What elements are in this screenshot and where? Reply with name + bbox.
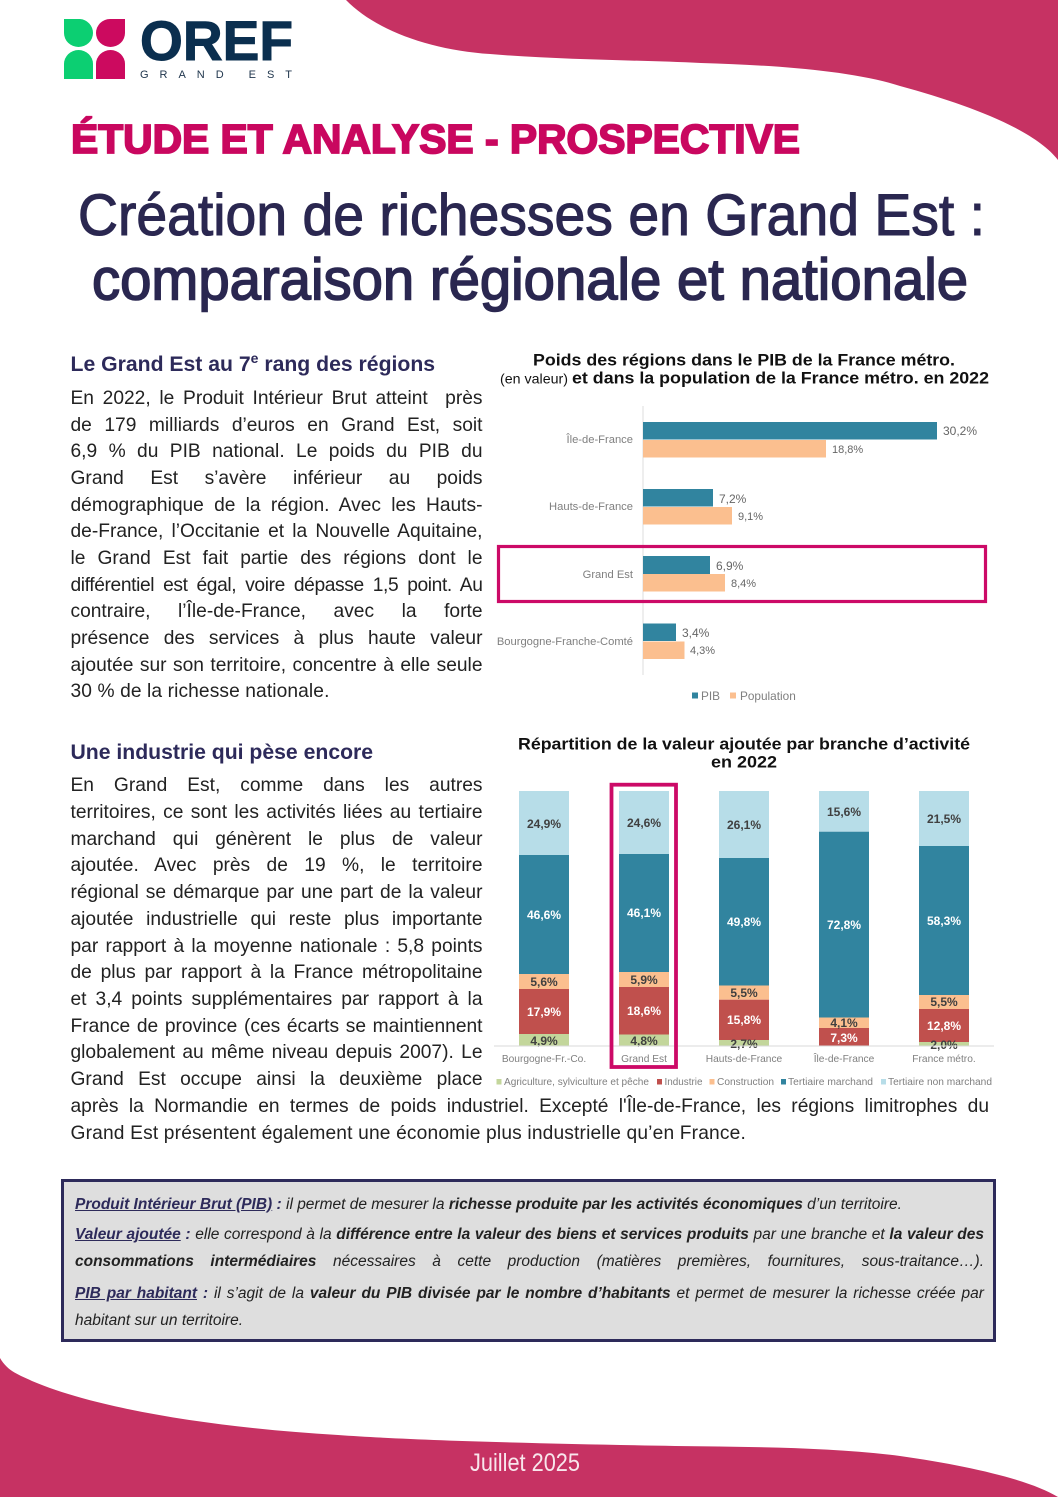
stacked bar: France métro.: 2,0% xyxy=(930,1038,958,1052)
stacked bar: Bourgogne-Fr.-Co.: 4,9% xyxy=(530,1034,558,1048)
body text: globalement au même niveau depuis 2007). Le xyxy=(70,1042,482,1063)
chart title xyxy=(518,736,970,772)
body text: de-France, l’Occitanie et la Nouvelle Aquitaine, xyxy=(70,521,482,542)
body text: Grand Est présentent également une économie plus industrielle qu’en France. xyxy=(70,1123,746,1144)
logo: OREF Grand Est xyxy=(64,9,293,81)
stacked bar: Île-de-France: 15,6% xyxy=(827,805,861,819)
stacked bar: France métro.: France métro. xyxy=(912,1054,976,1065)
bars: Hauts-de-France: 9,1% xyxy=(738,511,763,523)
logo: OREF Grand Est: GRAND EST xyxy=(140,69,292,81)
chart legend: Tertiaire non marchand xyxy=(888,1077,992,1088)
stacked bar: Île-de-France: Île-de-France xyxy=(813,1052,875,1065)
bars: Bourgogne-Franche-Comté: 3,4% xyxy=(682,626,710,640)
chart legend: PIB xyxy=(701,689,720,703)
stacked bar: Bourgogne-Fr.-Co. xyxy=(502,791,586,1065)
stacked bar: Grand Est: 46,1% xyxy=(627,906,661,920)
bars: Grand Est xyxy=(583,556,756,592)
stacked bar: France métro.: 12,8% xyxy=(927,1019,961,1033)
callout: définitions: habitant sur un territoire. xyxy=(75,1312,243,1329)
highlight box: Grand Est xyxy=(498,546,986,602)
stacked bar: Hauts-de-France: 2,7% xyxy=(730,1037,758,1051)
body text: contraire, l’Île-de-France, avec la forte xyxy=(70,601,482,622)
chart title: Poids des régions dans le PIB de la France métro. xyxy=(533,352,955,370)
stacked bar: Hauts-de-France: Hauts-de-France xyxy=(706,1054,783,1065)
stacked bar: Grand Est: 4,8% xyxy=(630,1034,658,1048)
body text: 30 % de la richesse nationale. xyxy=(70,681,330,702)
kicker heading: ÉTUDE ET ANALYSE - PROSPECTIVE xyxy=(71,116,800,162)
bars: Grand Est: Grand Est xyxy=(583,569,634,581)
bars: Bourgogne-Franche-Comté: 4,3% xyxy=(690,645,715,657)
bars: Hauts-de-France: Hauts-de-France xyxy=(549,501,633,513)
logo: OREF Grand Est: OREF xyxy=(140,9,293,72)
section: Une industrie qui pèse encore xyxy=(70,741,989,1144)
stacked bar: Bourgogne-Fr.-Co.: 46,6% xyxy=(527,908,561,922)
body text: par rapport à la moyenne nationale : 5,8 points xyxy=(70,936,482,957)
body text xyxy=(70,388,482,702)
body text: En Grand Est, comme dans les autres xyxy=(70,775,482,796)
body text: ajoutée sur son territoire, concentre à elle seule xyxy=(70,655,482,676)
chart legend: Construction xyxy=(717,1077,774,1088)
body text xyxy=(70,775,989,1144)
body text: ajoutée. Avec près de 19 %, le territoire xyxy=(70,855,482,876)
body text: et 3,4 points supplémentaires par rapport à la xyxy=(70,989,482,1010)
section heading: Une industrie qui pèse encore xyxy=(70,741,373,764)
bars: Grand Est: 8,4% xyxy=(731,578,756,590)
footer date: Juillet 2025 xyxy=(470,1449,580,1477)
chart title xyxy=(500,352,989,388)
stacked bar: Grand Est: 5,9% xyxy=(630,973,658,987)
bars: Île-de-France: Île-de-France xyxy=(565,433,633,446)
stacked bar: Hauts-de-France: 5,5% xyxy=(730,986,758,1000)
stacked bar: Île-de-France: 72,8% xyxy=(827,918,861,932)
callout: définitions: consommations intermédiaires nécessaires à cette production (matières premières, fournitures, sous-traitance…). xyxy=(75,1253,984,1270)
body text: France de province (ces écarts se maintiennent xyxy=(70,1016,482,1037)
stacked bar: France métro.: 5,5% xyxy=(930,995,958,1009)
body text: Grand Est s’avère inférieur au poids xyxy=(70,468,482,489)
stacked bar: France métro.: 21,5% xyxy=(927,812,961,826)
chart title: Répartition de la valeur ajoutée par branche d’activité xyxy=(518,736,970,754)
chart legend: Agriculture, sylviculture et pêche xyxy=(504,1077,649,1088)
bars: Île-de-France xyxy=(565,422,977,458)
stacked bar: Grand Est: 18,6% xyxy=(627,1004,661,1018)
stacked bar: Hauts-de-France: 15,8% xyxy=(727,1013,761,1027)
bars: Île-de-France: 18,8% xyxy=(832,444,863,456)
callout: définitions: PIB par habitant : il s’agit de la valeur du PIB divisée par le nombre d’habitants et permet de mesurer la richesse créée par xyxy=(75,1285,984,1302)
chart legend: Tertiaire marchand xyxy=(788,1077,873,1088)
body text: le Grand Est fait partie des régions dont le xyxy=(70,548,482,569)
stacked bar: Île-de-France xyxy=(813,791,875,1065)
body text: ajoutée industrielle qui reste plus importante xyxy=(70,909,482,930)
stacked bar: France métro.: 58,3% xyxy=(927,914,961,928)
bars: Bourgogne-Franche-Comté: Bourgogne-Franche-Comté xyxy=(497,636,633,648)
chart legend xyxy=(692,689,796,703)
body text: de plus par rapport à la France métropolitaine xyxy=(70,962,482,983)
bars: Hauts-de-France xyxy=(549,489,763,524)
body text: En 2022, le Produit Intérieur Brut atteint près xyxy=(70,388,482,409)
chart legend: Industrie xyxy=(664,1077,703,1088)
bars: Île-de-France: 30,2% xyxy=(943,424,977,438)
callout: définitions: Valeur ajoutée : elle correspond à la différence entre la valeur des biens et services produits par une branche et la valeur des xyxy=(75,1226,984,1243)
body text: démographique de la région. Avec les Hauts- xyxy=(70,495,482,516)
body text: de 179 milliards d’euros en Grand Est, soit xyxy=(70,415,482,436)
body text: régional se démarque par une part de la valeur xyxy=(70,882,482,903)
callout: définitions: Produit Intérieur Brut (PIB) : il permet de mesurer la richesse produite par les activités économiques d’un territoire. xyxy=(75,1196,902,1213)
bars: Hauts-de-France: 7,2% xyxy=(719,492,747,506)
section heading: Le Grand Est au 7e rang des régions xyxy=(70,350,435,376)
bars: Grand Est: 6,9% xyxy=(716,559,744,573)
callout: définitions xyxy=(61,1179,996,1342)
stacked bar: Île-de-France: 7,3% xyxy=(830,1031,858,1045)
main title: comparaison régionale et nationale xyxy=(92,248,968,312)
chart title: et dans la population de la France métro. en 2022 xyxy=(572,370,989,388)
main title xyxy=(78,183,985,312)
stacked bar: Île-de-France: 4,1% xyxy=(830,1016,858,1030)
stacked bar: Bourgogne-Fr.-Co.: 17,9% xyxy=(527,1005,561,1019)
bar chart: poids des régions dans le PIB et la population xyxy=(496,352,989,703)
chart title: (en valeur) xyxy=(500,370,568,386)
stacked bar: Bourgogne-Fr.-Co.: 24,9% xyxy=(527,817,561,831)
bars: Bourgogne-Franche-Comté xyxy=(497,624,715,659)
stacked bar: Grand Est: 24,6% xyxy=(627,816,661,830)
chart legend: Population xyxy=(740,689,796,703)
chart legend xyxy=(496,1077,992,1088)
stacked bar: Bourgogne-Fr.-Co.: Bourgogne-Fr.-Co. xyxy=(502,1054,586,1065)
stacked bar: Hauts-de-France: 26,1% xyxy=(727,818,761,832)
body text: différentiel est égal, voire dépasse 1,5 point. Au xyxy=(70,575,482,596)
section: Le Grand Est au 7e rang xyxy=(70,350,482,702)
main title: Création de richesses en Grand Est : xyxy=(78,183,985,248)
stacked bar: Hauts-de-France xyxy=(706,791,783,1065)
body text: Grand Est occupe ainsi la deuxième place xyxy=(70,1069,482,1090)
chart title: en 2022 xyxy=(711,754,777,772)
highlight box: Grand Est xyxy=(612,785,676,1067)
stacked bar: Grand Est xyxy=(619,791,669,1065)
body text: présence des services à plus haute valeur xyxy=(70,628,482,649)
stacked bar chart: répartition de la valeur ajoutée xyxy=(494,736,994,1088)
body text: territoires, ce sont les activités liées au tertiaire xyxy=(70,802,482,823)
body text: marchand qui génèrent le plus de valeur xyxy=(70,829,482,850)
body text: 6,9 % du PIB national. Le poids du PIB du xyxy=(70,441,482,462)
stacked bar: Bourgogne-Fr.-Co.: 5,6% xyxy=(530,975,558,989)
stacked bar: France métro. xyxy=(912,791,976,1065)
stacked bar: Hauts-de-France: 49,8% xyxy=(727,915,761,929)
body text: après la Normandie en termes de poids industriel. Excepté l'Île-de-France, les régions limitrophes du xyxy=(70,1096,989,1117)
stacked bar: Grand Est: Grand Est xyxy=(621,1054,667,1065)
